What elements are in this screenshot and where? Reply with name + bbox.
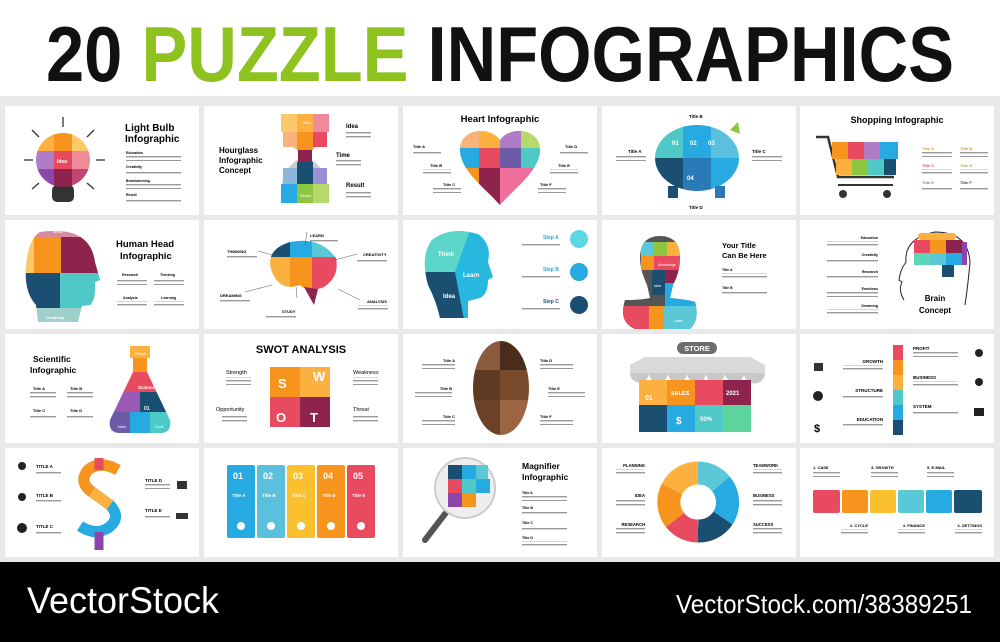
card 13: coffee bean: Title A	[443, 358, 455, 363]
card 12: swot: W	[313, 369, 326, 384]
card 2: hourglass: Infographic	[219, 156, 263, 165]
card 6: human head	[5, 220, 199, 329]
card 20: chain: 3. GROWTH	[871, 465, 894, 470]
card 10: brain concept: Concept	[919, 306, 951, 315]
card 11: scientific flask: Title C	[33, 408, 45, 413]
card 18: magnifier: Magnifier	[522, 461, 560, 471]
card 10: brain concept	[800, 220, 994, 329]
card 1: light bulb: Idea	[57, 159, 67, 165]
card 3: heart: Title F	[540, 182, 552, 187]
card 13: coffee bean: Title C	[443, 414, 455, 419]
card 20: chain: 5. E-MAIL	[927, 465, 946, 470]
card 11: scientific flask: Title D	[70, 408, 82, 413]
card 11: scientific flask: Idea	[118, 424, 127, 429]
card 10: brain concept: Research	[862, 270, 878, 274]
card 12: swot: O	[276, 410, 286, 425]
card 20: chain: 1. CASE	[813, 465, 829, 470]
card 17: five columns: 03	[293, 471, 303, 481]
card 1: light bulb: Result	[126, 193, 138, 197]
card 20: chain: 2. CYCLE	[850, 523, 868, 528]
card 2: hourglass: Time	[336, 153, 351, 159]
card 17: five columns: 04	[323, 471, 333, 481]
card 14: store	[602, 334, 796, 443]
card 4: piggy bank: Title B	[689, 114, 703, 119]
card 11: scientific flask: Title A	[33, 386, 45, 391]
card 13: coffee bean: Title F	[540, 414, 552, 419]
card 19: ring: TEAMWORK	[753, 463, 778, 468]
card 4: piggy bank: Title C	[752, 149, 766, 154]
card 5: shopping cart: Title E	[922, 180, 934, 185]
card 16: dollar sign: TITLE B	[36, 493, 54, 498]
card 15: vertical bar	[800, 334, 994, 443]
card 2: hourglass: Result	[300, 193, 312, 198]
card 5: shopping cart: Title A	[922, 146, 934, 151]
card 6: human head: Ideas	[53, 229, 63, 234]
footer bar: VectorStock	[27, 580, 219, 621]
card 12: swot: S	[278, 376, 287, 391]
card 11: scientific flask: Scientific	[33, 354, 71, 364]
card 8: think learn idea head: Think	[438, 252, 455, 258]
card 2: hourglass: Hourglass	[219, 146, 259, 155]
card 9: your title bust: Learn	[674, 319, 683, 323]
card 8: think learn idea head: Step C	[543, 299, 559, 305]
card 6: human head: Research	[122, 273, 138, 277]
card 6: human head: Creativity	[46, 315, 65, 320]
card 9: your title bust: Knowledge	[658, 263, 676, 267]
card 20: chain: 4. FINANCE	[903, 523, 925, 528]
card 8: think learn idea head: Idea	[443, 294, 456, 300]
card 15: vertical bar: $	[814, 423, 820, 435]
card 14: store: STORE	[684, 344, 710, 353]
card 16: dollar sign: TITLE A	[36, 464, 54, 469]
card 9: your title bust: Your Title	[722, 241, 756, 250]
card 19: ring: IDEA	[635, 493, 645, 498]
card 17: five columns: 02	[263, 471, 273, 481]
card 15: vertical bar: STRUCTURE	[855, 388, 883, 393]
card 3: heart: Title E	[558, 163, 570, 168]
footer bar	[0, 562, 1000, 642]
card 13: coffee bean: Title E	[548, 386, 560, 391]
card 12: swot: SWOT ANALYSIS	[256, 344, 346, 356]
card 7: brain: LEARN	[310, 233, 324, 238]
card 8: think learn idea head: Learn	[463, 273, 480, 279]
card 14: store: 01	[645, 395, 653, 402]
card 13: coffee bean: Title B	[440, 386, 452, 391]
card 9: your title bust: Can Be Here	[722, 251, 767, 260]
card 4: piggy bank: Title A	[628, 149, 642, 154]
footer bar: VectorStock.com/38389251	[676, 589, 972, 619]
card 18: magnifier: Title C	[522, 521, 533, 525]
card 4: piggy bank: 04	[687, 176, 694, 182]
card 1: light bulb: Light Bulb	[125, 123, 174, 134]
card 6: human head: Infographic	[120, 251, 172, 262]
card 17: five columns: Title E	[352, 493, 365, 498]
card 10: brain concept: Brain	[925, 294, 945, 303]
card 15: vertical bar: SYSTEM	[913, 404, 932, 409]
card 19: ring	[602, 448, 796, 557]
card 18: magnifier: Title D	[522, 536, 533, 540]
card 9: your title bust: Title A	[722, 268, 733, 272]
title: 20 PUZZLE INFOGRAPHICS	[46, 10, 954, 98]
card 3: heart: Heart Infographic	[461, 114, 539, 125]
card 19: ring: SUCCESS	[753, 522, 773, 527]
card 3: heart: Title D	[565, 144, 577, 149]
card 17: five columns: 05	[353, 471, 363, 481]
card 18: magnifier: Title B	[522, 506, 533, 510]
card 12: swot	[204, 334, 398, 443]
card 11: scientific flask: Goal	[155, 424, 164, 429]
card 5: shopping cart: Title F	[960, 180, 972, 185]
card 19: ring: PLANNING	[623, 463, 645, 468]
card 17: five columns: 01	[233, 471, 243, 481]
card 12: swot: T	[310, 410, 318, 425]
card 7: brain	[204, 220, 398, 329]
card 3: heart	[403, 106, 597, 215]
card 16: dollar sign	[5, 448, 199, 557]
card 7: brain: THINKING	[227, 249, 246, 254]
card 10: brain concept: Emotions	[862, 287, 878, 291]
card 16: dollar sign: TITLE C	[36, 524, 54, 529]
card 13: coffee bean	[403, 334, 597, 443]
card 7: brain: STUDY	[282, 309, 296, 314]
card 20: chain: 6. SETTINGS	[958, 523, 982, 528]
card 3: heart: Title C	[443, 182, 455, 187]
card 11: scientific flask: Infographic	[30, 365, 77, 375]
card 10: brain concept: Dreaming	[861, 304, 878, 308]
card 9: your title bust	[602, 220, 796, 329]
card 18: magnifier: Infographic	[522, 472, 569, 482]
card 18: magnifier	[403, 448, 597, 557]
card 5: shopping cart: Title C	[922, 163, 934, 168]
card 18: magnifier: Title A	[522, 491, 533, 495]
card 9: your title bust: Idea	[654, 284, 661, 288]
card 1: light bulb: Infographic	[125, 134, 180, 145]
card 11: scientific flask	[5, 334, 199, 443]
card 15: vertical bar: GROWTH	[862, 359, 883, 364]
card 15: vertical bar: PROFIT	[913, 346, 930, 351]
card 16: dollar sign: TITLE E	[145, 508, 162, 513]
card 1: light bulb: Creativity	[126, 165, 142, 169]
card 3: heart: Title A	[413, 144, 425, 149]
card 8: think learn idea head: Step B	[543, 267, 559, 273]
card 2: hourglass: Result	[346, 183, 364, 189]
card 12: swot: Strength	[226, 370, 247, 376]
card 13: coffee bean: Title D	[540, 358, 552, 363]
card 10: brain concept: Education	[861, 236, 878, 240]
card 17: five columns	[204, 448, 398, 557]
card 8: think learn idea head	[403, 220, 597, 329]
card 2: hourglass	[204, 106, 398, 215]
card 11: scientific flask: Result	[135, 351, 147, 356]
card 2: hourglass: Idea	[303, 120, 312, 125]
card 4: piggy bank: 01	[672, 141, 679, 147]
card 5: shopping cart: Shopping Infographic	[850, 115, 944, 125]
card 12: swot: Threat	[353, 407, 369, 413]
card 7: brain: CREATIVITY	[363, 252, 387, 257]
card 14: store: SALES	[671, 391, 690, 397]
card 1: light bulb	[5, 106, 199, 215]
card 17: five columns: Title D	[322, 493, 336, 498]
card 15: vertical bar: EDUCATION	[857, 417, 883, 422]
card 1: light bulb: Education	[126, 151, 143, 155]
card 17: five columns: Title B	[262, 493, 276, 498]
card 17: five columns: Title A	[232, 493, 246, 498]
card 4: piggy bank: 02	[690, 141, 697, 147]
card 12: swot: Weakness	[353, 370, 379, 376]
card 10: brain concept: Creativity	[862, 253, 878, 257]
card 16: dollar sign: TITLE D	[145, 478, 163, 483]
card 9: your title bust: Title B	[722, 286, 733, 290]
card 6: human head: Thinking	[160, 273, 175, 277]
card 20: chain	[800, 448, 994, 557]
card 14: store: $	[676, 416, 682, 427]
card 4: piggy bank	[602, 106, 796, 215]
card 3: heart: Title B	[430, 163, 442, 168]
card 19: ring: BUSINESS	[753, 493, 775, 498]
card 2: hourglass: Concept	[219, 166, 251, 175]
card 6: human head: Analysis	[123, 296, 138, 300]
card 19: ring: RESEARCH	[622, 522, 645, 527]
card 11: scientific flask: Science	[138, 385, 156, 390]
card 6: human head: Learning	[161, 296, 176, 300]
card 5: shopping cart: Title D	[960, 163, 972, 168]
grid background	[0, 96, 1000, 562]
card 4: piggy bank: Title D	[689, 205, 703, 210]
card 1: light bulb: Brainstorming	[126, 179, 150, 183]
card 2: hourglass: Idea	[346, 124, 359, 130]
card 5: shopping cart	[800, 106, 994, 215]
card 12: swot: Opportunity	[216, 407, 245, 413]
card 17: five columns: Title C	[292, 493, 306, 498]
card 6: human head: Human Head	[116, 239, 174, 250]
card 11: scientific flask: 01	[144, 406, 150, 412]
card 14: store: 2021	[726, 391, 740, 397]
card 5: shopping cart: Title B	[960, 146, 972, 151]
card 14: store: 50%	[700, 417, 713, 423]
card 8: think learn idea head: Step A	[543, 235, 559, 241]
card 7: brain: DREAMING	[220, 293, 242, 298]
card 11: scientific flask: Title B	[70, 386, 82, 391]
card 7: brain: ANALYSIS	[367, 299, 387, 304]
card 15: vertical bar: BUSINESS	[913, 375, 936, 380]
card 4: piggy bank: 03	[708, 141, 715, 147]
